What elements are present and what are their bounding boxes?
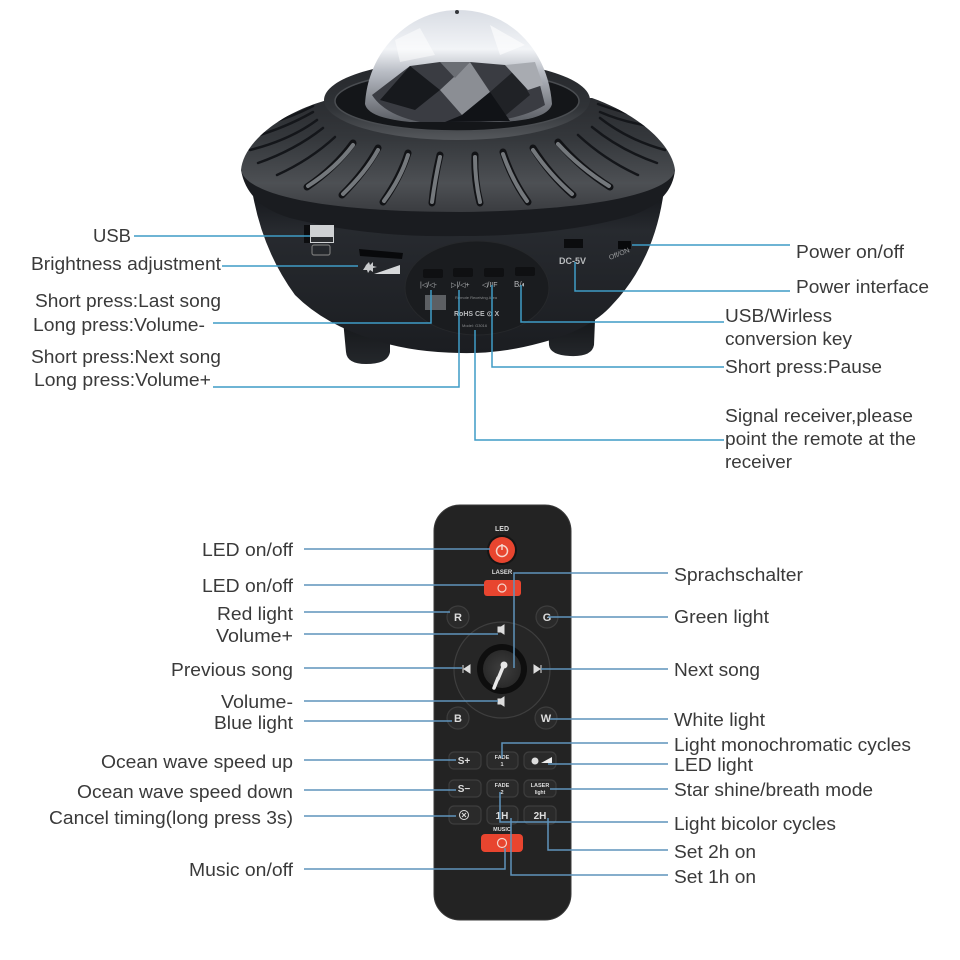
button B: B xyxy=(454,713,462,725)
brim slits xyxy=(250,104,665,203)
music power button: MUSIC xyxy=(493,827,511,833)
button R xyxy=(447,606,469,628)
control panel: |◁/◁- xyxy=(420,282,438,289)
callout: laser on/off: LED on/off xyxy=(202,576,294,596)
button S+: S+ xyxy=(458,756,470,767)
control panel: ◁/IIF xyxy=(482,282,498,289)
callout: power on/off: Power on/off xyxy=(796,242,905,262)
callout: pause xyxy=(492,285,882,377)
callout: bicolor cycles xyxy=(500,792,836,834)
button FADE 2: FADE xyxy=(495,783,510,789)
control panel: Remote Receiving Area xyxy=(455,295,498,300)
callout: red light: Red light xyxy=(217,604,293,624)
callout: last song xyxy=(33,290,431,335)
callout: cancel timing: Cancel timing(long press 3s) xyxy=(49,808,293,828)
foot right xyxy=(548,320,595,356)
callout: set 2h: Set 2h on xyxy=(674,842,756,862)
callout: power interface xyxy=(575,262,929,297)
button G: G xyxy=(543,612,551,624)
control panel: ▷|/◁+ xyxy=(451,282,470,289)
callout: last song: Short press:Last song xyxy=(35,291,221,311)
power switch xyxy=(608,241,631,262)
button FADE 1 xyxy=(487,752,518,769)
LED power button xyxy=(487,526,517,565)
remote control xyxy=(434,505,571,920)
callout: voice switch xyxy=(514,565,803,668)
laser power button: LASER xyxy=(492,570,513,576)
callout: signal receiver: Signal receiver,please xyxy=(725,406,913,426)
button FADE 2: 2 xyxy=(500,790,504,796)
button FADE 1: FADE xyxy=(495,755,510,761)
callout: white light: White light xyxy=(674,710,765,730)
callout: LED on/off: LED on/off xyxy=(202,540,294,560)
remote body xyxy=(434,505,571,920)
body bowl xyxy=(252,190,664,353)
brim top surface xyxy=(241,98,675,212)
button timer cancel xyxy=(449,806,481,824)
callout: wave speed up: Ocean wave speed up xyxy=(101,752,293,772)
callout: LED light: LED light xyxy=(674,755,753,775)
callout: previous song: Previous song xyxy=(171,660,293,680)
button B xyxy=(447,707,469,729)
button S-: S− xyxy=(458,784,470,795)
callout: signal receiver: point the remote at the xyxy=(725,429,916,449)
callout: wave speed down: Ocean wave speed down xyxy=(77,782,293,802)
callout: brightness adjustment: Brightness adjustment xyxy=(31,254,221,274)
DC port: DC-5V xyxy=(559,256,586,266)
callout: power interface: Power interface xyxy=(796,277,929,297)
button S+ xyxy=(449,752,481,769)
callout: pause: Short press:Pause xyxy=(725,357,882,377)
callout: set 1h: Set 1h on xyxy=(674,867,756,887)
control panel: RoHS CE ⊙ X xyxy=(454,311,499,318)
callout: green light: Green light xyxy=(674,607,769,627)
button W: W xyxy=(541,713,552,725)
laser power button xyxy=(484,570,521,596)
callout: USB/wireless key: USB/Wirless xyxy=(725,306,832,326)
callout: monochromatic cycles: Light monochromatic cycles xyxy=(674,735,911,755)
button W xyxy=(535,707,557,729)
power switch: Off/ON xyxy=(608,247,631,262)
callout: last song: Long press:Volume- xyxy=(33,315,205,335)
button FADE 2 xyxy=(487,780,518,797)
button LASER light: LASER xyxy=(531,783,549,789)
callout: next song: Short press:Next song xyxy=(31,347,221,367)
button S- xyxy=(449,780,481,797)
collar ring xyxy=(324,60,590,140)
callout: USB: USB xyxy=(93,226,131,246)
button LASER light xyxy=(524,780,556,797)
LED power button: LED xyxy=(495,526,509,533)
callout: star shine: Star shine/breath mode xyxy=(674,780,873,800)
callout: monochromatic cycles xyxy=(502,735,911,758)
button LASER light: light xyxy=(535,790,546,796)
control panel: B/◐ xyxy=(514,280,527,289)
music power button xyxy=(481,827,523,852)
callout: set 1h xyxy=(511,818,756,887)
rim band xyxy=(241,170,675,236)
callout: USB/wireless key xyxy=(521,285,852,349)
button FADE 1: 1 xyxy=(500,762,504,768)
callout: next song: Next song xyxy=(674,660,760,680)
callout: USB/wireless key: conversion key xyxy=(725,329,852,349)
button 2H: 2H xyxy=(534,811,546,822)
callout: signal receiver xyxy=(475,330,916,472)
control panel xyxy=(405,241,549,335)
product photo: projector xyxy=(241,10,675,364)
callout: signal receiver: receiver xyxy=(725,452,792,472)
DC port xyxy=(559,239,586,266)
callout: volume up: Volume+ xyxy=(216,626,293,646)
crystal dome xyxy=(365,10,552,122)
memory card slot and brightness icon xyxy=(359,249,403,274)
button 2H xyxy=(524,806,556,824)
callout: music on/off xyxy=(189,848,505,880)
button G xyxy=(536,606,558,628)
navigation ring xyxy=(454,622,550,718)
foot left xyxy=(343,320,390,364)
USB port xyxy=(304,225,334,255)
callout: next song xyxy=(31,290,459,390)
callout: voice switch: Sprachschalter xyxy=(674,565,803,585)
button LED light xyxy=(524,752,556,769)
callout: blue light: Blue light xyxy=(214,713,293,733)
callout: set 2h xyxy=(548,818,756,862)
button 1H: 1H xyxy=(496,811,508,822)
control panel: Model: G3016 xyxy=(462,323,488,328)
callout: volume down: Volume- xyxy=(221,692,293,712)
callout: next song: Long press:Volume+ xyxy=(34,370,211,390)
button R: R xyxy=(454,612,462,624)
callout: music on/off: Music on/off xyxy=(189,860,294,880)
callout: bicolor cycles: Light bicolor cycles xyxy=(674,814,836,834)
button 1H xyxy=(487,806,518,824)
